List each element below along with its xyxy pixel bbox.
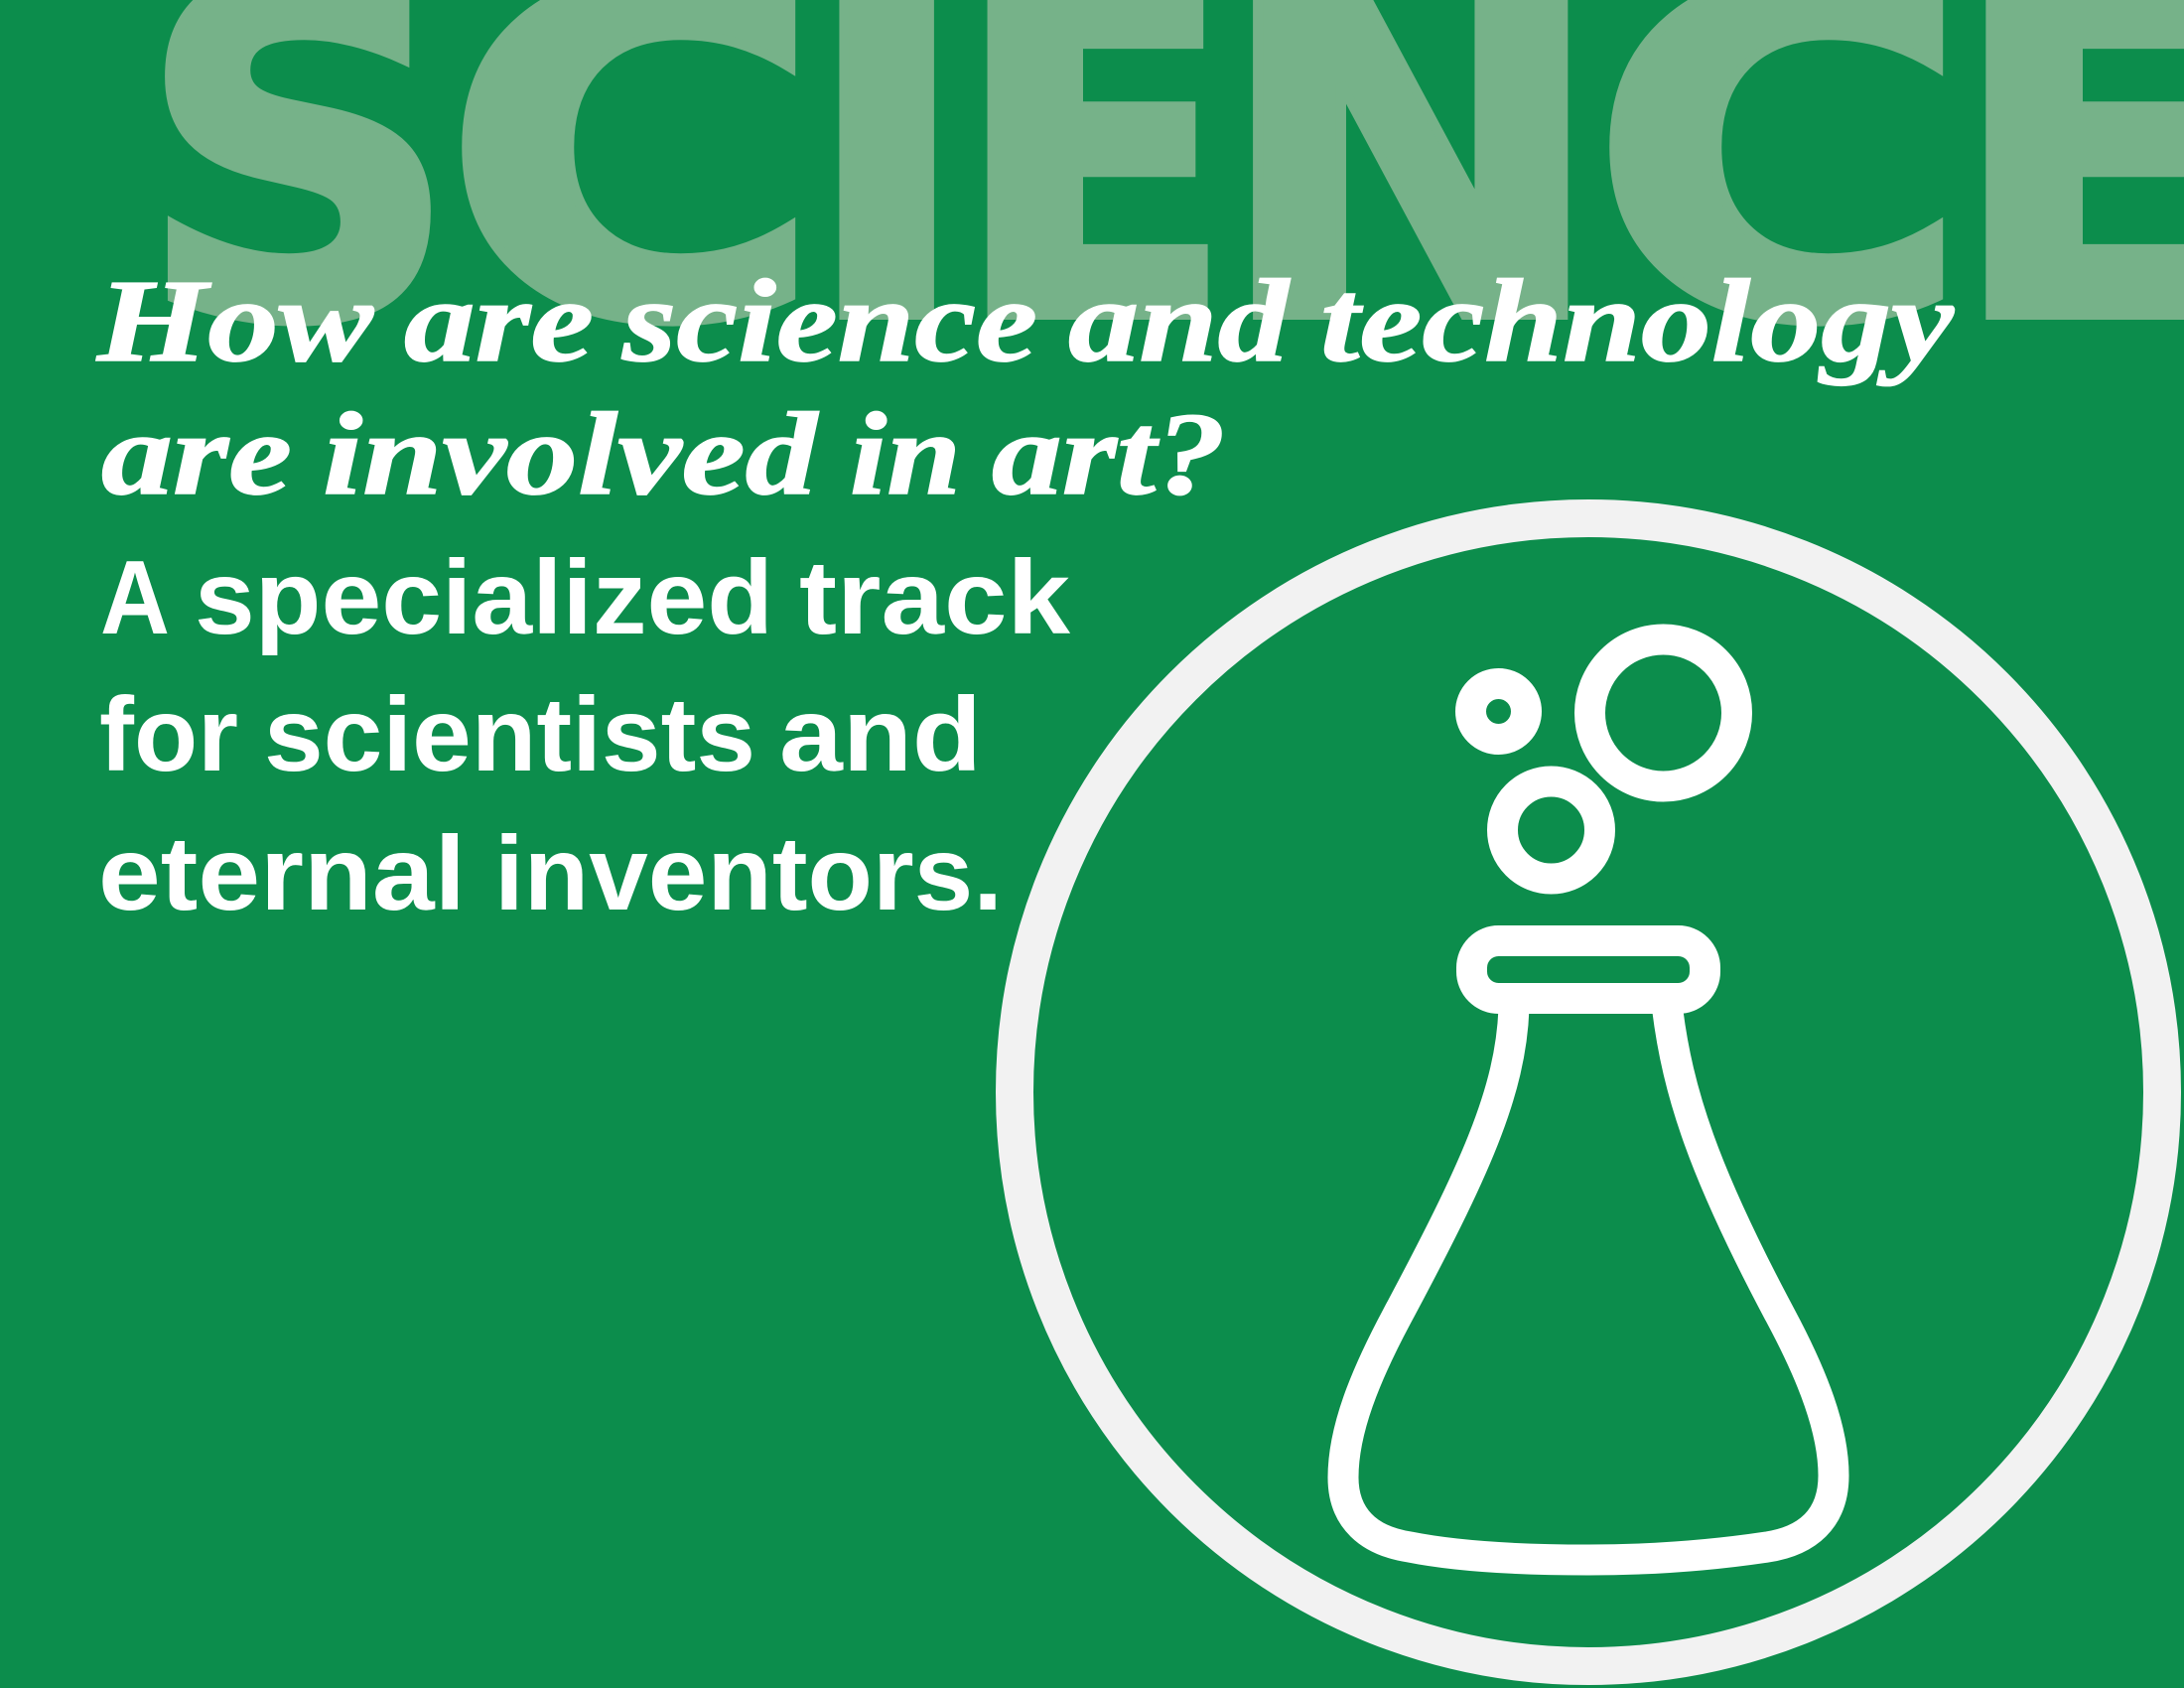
- bubble: large: [1590, 639, 1737, 786]
- text block: track description: inventors.: [494, 815, 1003, 932]
- heading: question: technology: [1320, 255, 1955, 386]
- text block: track description: for: [99, 676, 238, 793]
- heading: question: are: [101, 388, 292, 519]
- heading: question: [96, 255, 1955, 519]
- bubble: medium: [1503, 781, 1600, 879]
- heading: question: and: [1068, 255, 1291, 386]
- heading: question: art?: [992, 388, 1226, 519]
- icon: flask with bubbles: [1343, 639, 1834, 1560]
- bubble: small: [1471, 683, 1527, 739]
- text block: track description: [98, 539, 1071, 932]
- heading: question: science: [621, 255, 1037, 386]
- text block: track description: A: [100, 539, 170, 656]
- flask body: [1343, 1008, 1834, 1560]
- text block: track description: scientists: [264, 676, 755, 793]
- text block: track description: specialized: [195, 539, 773, 656]
- text block: track description: and: [779, 676, 982, 793]
- heading: question: involved: [323, 388, 819, 519]
- text block: track description: track: [799, 539, 1071, 656]
- text block: track description: eternal: [98, 815, 466, 932]
- heading: question: are: [404, 255, 594, 386]
- heading: question: How: [96, 255, 374, 386]
- heading: question: in: [850, 388, 961, 519]
- icon ring: [1015, 518, 2162, 1666]
- background word: SCIENCE: [138, 0, 2184, 424]
- flask stopper: [1471, 941, 1706, 999]
